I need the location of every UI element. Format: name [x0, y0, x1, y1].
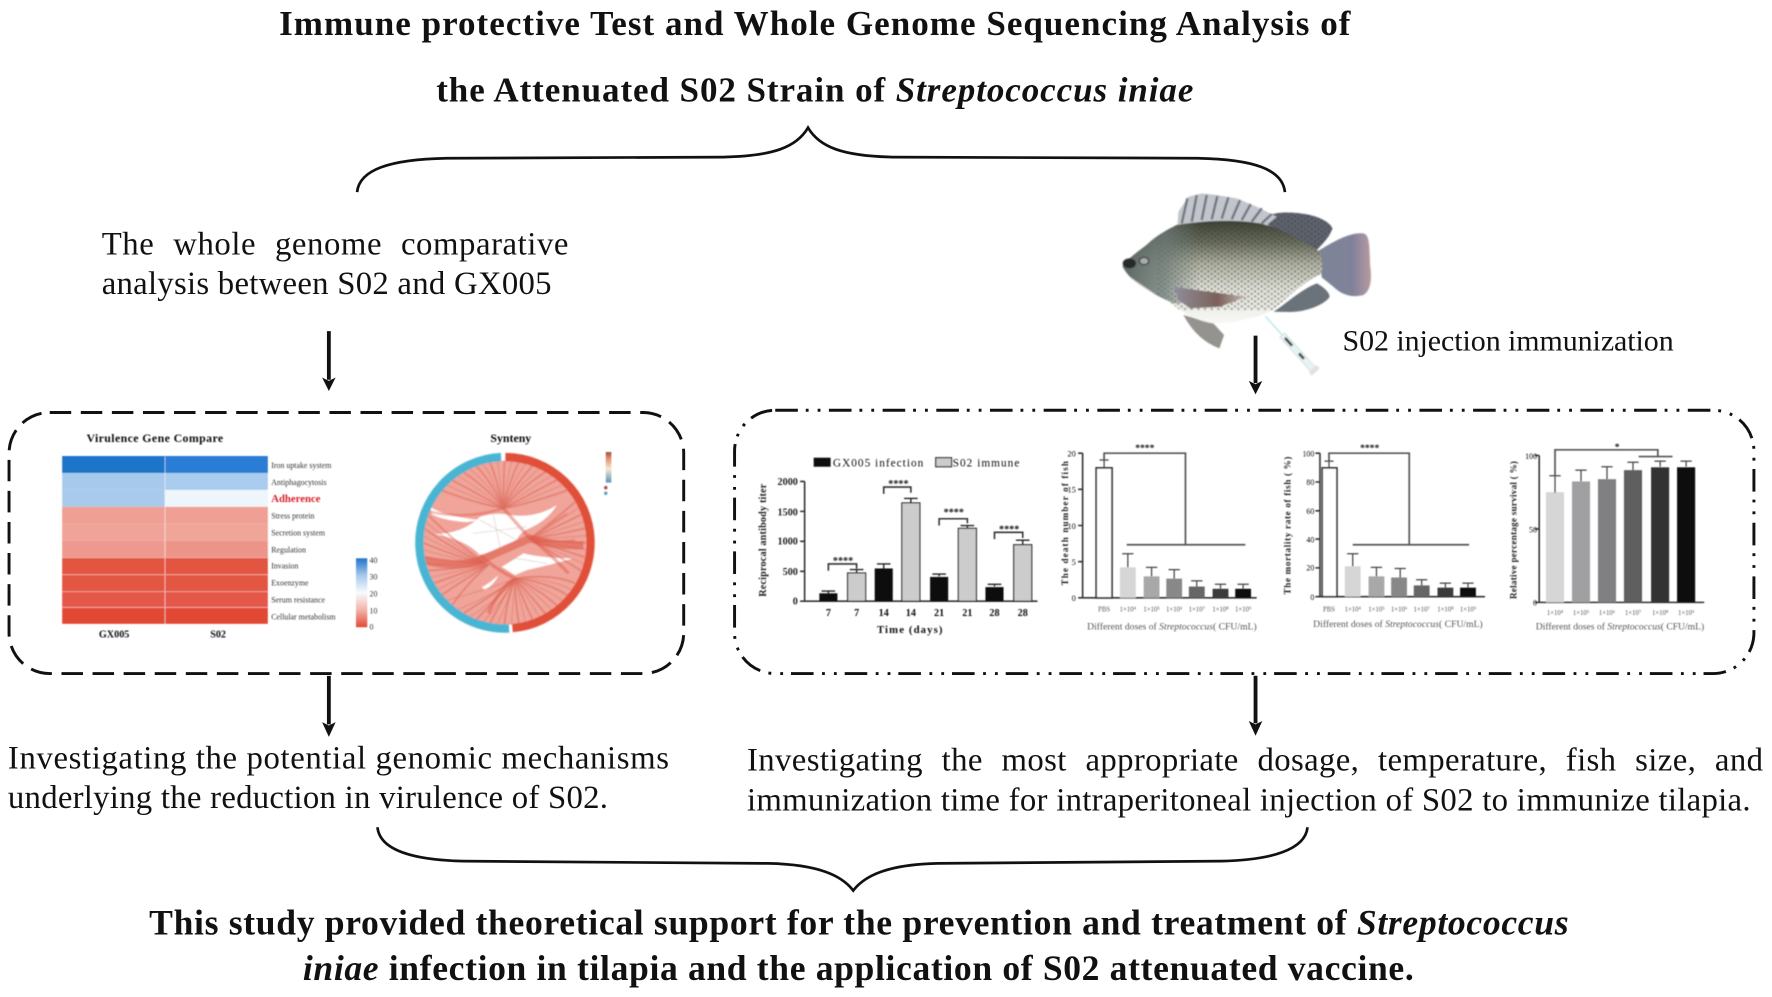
text: genomic mechanisms: Investigating the potential genomic mechanisms — [8, 740, 669, 776]
red ring sector — [505, 457, 591, 628]
bar chart: relative percentage survival: 1×10⁶ — [1599, 610, 1616, 617]
bar chart: reciprocal antibody titer: **** — [888, 479, 909, 490]
heatmap colour legend: 10 — [370, 607, 377, 616]
bar chart: mortality rate of fish: 1×10⁹ — [1460, 606, 1477, 613]
bar chart: death number of fish: 1×10⁶ — [1166, 606, 1183, 613]
pectoral fin — [1174, 287, 1247, 308]
lower fine streaks — [447, 578, 571, 624]
bar chart: reciprocal antibody titer: S02 immune — [953, 458, 1019, 470]
bar chart: relative percentage survival: Relative percentage survival ( %) — [1509, 461, 1519, 599]
bar chart: relative percentage survival: 50 — [1529, 525, 1537, 534]
title — [279, 4, 1351, 110]
bar chart: death number of fish: Different doses of Streptococcus( CFU/mL) — [1087, 621, 1257, 632]
bar chart: reciprocal antibody titer: 2000 — [778, 477, 798, 488]
conclusion: iniae infection in tilapia and the application of S02 attenuated vaccine. — [303, 948, 1414, 988]
bar chart: reciprocal antibody titer: 1500 — [778, 507, 798, 518]
heatmap: virulence gene compare: Invasion — [271, 561, 298, 570]
body — [1123, 221, 1322, 323]
heatmap: virulence gene compare: Serum resistance — [271, 595, 326, 604]
head shade — [1122, 224, 1196, 304]
bar chart: relative percentage survival: Different doses of Streptococcus( CFU/mL) — [1536, 621, 1704, 632]
upper white gap — [430, 507, 480, 522]
text: genome comparative analysis: analysis between S02 and GX005 — [102, 266, 551, 302]
text: dosage investigation — [747, 743, 1763, 818]
bar chart: reciprocal antibody titer — [758, 458, 1037, 636]
heading: synteny: Synteny — [490, 431, 531, 445]
bar chart: mortality rate of fish: PBS — [1323, 606, 1335, 613]
bar chart: reciprocal antibody titer: 500 — [783, 567, 798, 578]
text: genome comparative analysis — [102, 226, 568, 302]
bar chart: reciprocal antibody titer: Reciprocal antibody titer — [758, 483, 769, 597]
title: the Attenuated S02 Strain of Streptococcus iniae — [436, 71, 1193, 110]
heatmap colour legend: 30 — [370, 573, 377, 582]
heatmap: virulence gene compare: Stress protein — [271, 512, 315, 521]
bar chart: death number of fish: 1×10⁴ — [1120, 606, 1137, 613]
icon: tilapia fish with syringe — [1120, 193, 1371, 376]
bottom brace — [377, 827, 1308, 891]
body scales — [1157, 220, 1323, 310]
bar chart: death number of fish: The death number of fish — [1060, 461, 1070, 585]
text: genomic mechanisms — [8, 740, 669, 816]
bar chart: reciprocal antibody titer: Time (days) — [877, 624, 943, 636]
bar chart: relative percentage survival: 0 — [1533, 599, 1537, 608]
chord legend — [604, 452, 611, 495]
bar chart: death number of fish: 1×10⁵ — [1143, 606, 1160, 613]
bar chart: mortality rate of fish: 0 — [1310, 593, 1314, 602]
top brace — [357, 128, 1285, 192]
bar chart: mortality rate of fish: Different doses of Streptococcus( CFU/mL) — [1313, 619, 1483, 630]
bar chart: death number of fish: **** — [1135, 443, 1155, 454]
bar chart: relative percentage survival — [1509, 442, 1704, 632]
heatmap: virulence gene compare: GX005 — [99, 629, 129, 640]
panel: genome comparison — [9, 412, 684, 674]
bar chart: mortality rate of fish: 40 — [1306, 535, 1314, 544]
label: S02 injection immunization: S02 injection immunization — [1343, 324, 1674, 357]
rear dorsal fin — [1260, 213, 1332, 252]
bottom sliver — [482, 575, 498, 590]
heatmap: virulence gene compare: Adherence — [271, 493, 321, 505]
bar chart: mortality rate of fish: **** — [1360, 443, 1379, 454]
arrow: genome panel to mechanisms — [322, 676, 336, 737]
chord diagram: synteny — [419, 457, 591, 629]
bar chart: reciprocal antibody titer: 21 — [962, 608, 972, 619]
bar chart: death number of fish: 1×10⁹ — [1235, 606, 1252, 613]
heatmap colour legend — [356, 556, 377, 631]
heatmap: virulence gene compare: Iron uptake system — [271, 461, 332, 470]
bar chart: death number of fish: PBS — [1098, 606, 1110, 613]
text: genome comparative analysis: The whole genome comparative — [102, 226, 568, 262]
anal fin — [1273, 283, 1330, 312]
bar chart: reciprocal antibody titer: GX005 infection — [833, 458, 924, 470]
heatmap colour legend: 20 — [370, 590, 377, 599]
bar chart: relative percentage survival: 100 — [1525, 452, 1537, 461]
heatmap: virulence gene compare: Secretion system — [271, 529, 326, 538]
arrow: genome analysis to panel — [322, 331, 336, 391]
bar chart: reciprocal antibody titer: 28 — [1018, 608, 1028, 619]
bar chart: reciprocal antibody titer: 7 — [826, 608, 831, 619]
bar chart: death number of fish: 1×10⁸ — [1212, 606, 1229, 613]
arrow: chart panel to dosage — [1249, 676, 1262, 736]
central crossing bands — [423, 538, 583, 564]
heatmap: virulence gene compare: Regulation — [271, 546, 306, 555]
mouth — [1123, 258, 1136, 268]
text: genomic mechanisms: underlying the reduction in virulence of S02. — [8, 780, 608, 816]
bar chart: reciprocal antibody titer: **** — [944, 507, 964, 518]
bar chart: death number of fish: 15 — [1067, 485, 1076, 495]
eye — [1139, 257, 1149, 265]
bar chart: reciprocal antibody titer: 14 — [906, 608, 916, 619]
heatmap: virulence gene compare: Exoenzyme — [271, 578, 309, 587]
tail fin — [1318, 233, 1371, 296]
bar chart: relative percentage survival: 1×10⁵ — [1573, 610, 1590, 617]
arrow: fish to panel — [1249, 336, 1262, 394]
bar chart: mortality rate of fish: 1×10⁴ — [1345, 606, 1362, 613]
bar chart: reciprocal antibody titer: 28 — [989, 608, 1000, 619]
bar chart: mortality rate of fish — [1283, 443, 1485, 630]
heatmap colour legend: 40 — [370, 556, 377, 565]
upper fine streaks — [447, 461, 562, 508]
bar chart: mortality rate of fish: 80 — [1306, 478, 1314, 487]
panel: vaccine immunisation charts — [735, 410, 1754, 674]
bar chart: death number of fish: 1×10⁷ — [1189, 606, 1206, 613]
bar chart: mortality rate of fish: 60 — [1306, 507, 1314, 516]
syringe — [1262, 313, 1320, 376]
bar chart: mortality rate of fish: 100 — [1302, 450, 1314, 459]
heatmap: virulence gene compare: Cellular metabolism — [271, 612, 336, 621]
bar chart: death number of fish: 5 — [1072, 557, 1076, 567]
central white gap — [435, 505, 557, 555]
bar chart: reciprocal antibody titer: 21 — [934, 608, 944, 619]
rear dorsal fin spots — [1260, 213, 1332, 252]
bar chart: relative percentage survival: 1×10⁹ — [1678, 610, 1695, 617]
right fine streaks — [538, 508, 586, 564]
heatmap: virulence gene compare: S02 — [210, 629, 226, 640]
bar chart: mortality rate of fish: 20 — [1306, 564, 1314, 573]
lower streak fan — [463, 577, 575, 624]
bar chart: reciprocal antibody titer: **** — [833, 556, 853, 567]
text: dosage investigation: Investigating the most appropriate dosage, temperature, fish size, and — [747, 743, 1763, 779]
heatmap: virulence gene compare: Virulence Gene Compare — [86, 431, 223, 445]
right streak fan — [530, 502, 586, 571]
conclusion — [149, 903, 1569, 988]
left fine streaks — [423, 522, 488, 590]
bar chart: reciprocal antibody titer: **** — [999, 524, 1019, 535]
lower white gap — [502, 553, 573, 575]
bar chart: mortality rate of fish: The mortality rate of fish ( %) — [1283, 457, 1293, 594]
faint threads in white gap — [473, 515, 547, 563]
text: dosage investigation: immunization time for intraperitoneal injection of S02 to immunize tilapia. — [747, 782, 1751, 818]
heatmap: virulence gene compare: Antiphagocytosis — [271, 478, 327, 487]
bar chart: reciprocal antibody titer: 14 — [879, 608, 889, 619]
bar chart: reciprocal antibody titer: 1000 — [778, 537, 798, 548]
bar chart: death number of fish: 20 — [1067, 449, 1076, 459]
bar chart: mortality rate of fish: 1×10⁵ — [1368, 606, 1385, 613]
front dorsal fin — [1177, 193, 1277, 225]
title: Immune protective Test and Whole Genome Sequencing Analysis of — [279, 4, 1351, 43]
bar chart: mortality rate of fish: 1×10⁷ — [1414, 606, 1430, 613]
bar chart: mortality rate of fish: 1×10⁸ — [1437, 606, 1454, 613]
bar chart: relative percentage survival: * — [1615, 442, 1620, 453]
heatmap colour legend: 0 — [370, 622, 374, 631]
bar chart: death number of fish: 10 — [1067, 521, 1076, 531]
bar chart: relative percentage survival: 1×10⁸ — [1652, 610, 1669, 617]
conclusion: This study provided theoretical support for the prevention and treatment of Streptococcus — [149, 903, 1569, 943]
bar chart: death number of fish — [1060, 443, 1257, 632]
heatmap: virulence gene compare — [62, 431, 336, 640]
bar chart: death number of fish: 0 — [1072, 593, 1076, 603]
blue ring sector — [419, 457, 509, 629]
bar chart: reciprocal antibody titer: 7 — [854, 608, 859, 619]
bar chart: relative percentage survival: 1×10⁴ — [1547, 610, 1564, 617]
bar chart: mortality rate of fish: 1×10⁶ — [1391, 606, 1408, 613]
upper streak fan — [442, 461, 567, 508]
ventral fin — [1183, 315, 1224, 348]
bar chart: relative percentage survival: 1×10⁷ — [1625, 610, 1642, 617]
bar chart: reciprocal antibody titer: 0 — [793, 597, 798, 608]
left streak fan — [423, 515, 488, 605]
dorsal rays — [1182, 195, 1272, 223]
